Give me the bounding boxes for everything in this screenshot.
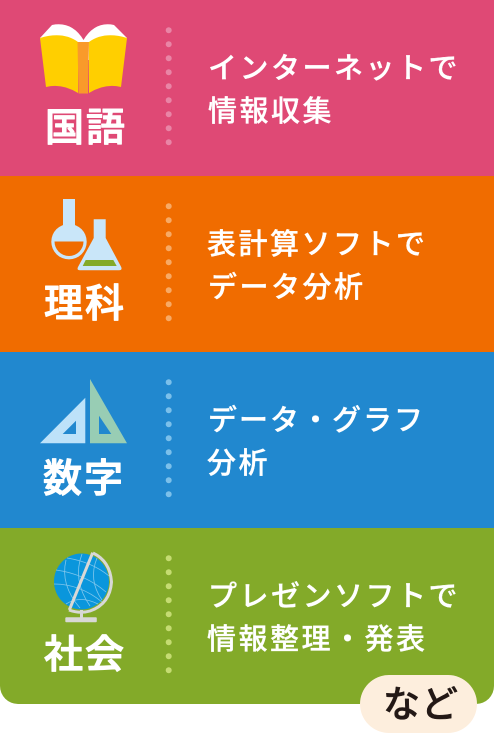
icon: flasks — [51, 199, 122, 270]
text: sugaku: データ・グラフ — [208, 404, 425, 437]
panel: sugaku — [0, 352, 494, 528]
text: rika — [207, 228, 428, 304]
text: kokugo — [208, 53, 460, 128]
text: kokugo: 情報収集 — [208, 95, 334, 128]
heading: rika: 理科 — [44, 283, 126, 326]
text: sugaku: 分析 — [207, 447, 270, 480]
icon: set squares — [40, 379, 127, 443]
text: kokugo: インターネットで — [208, 53, 460, 85]
heading: kokugo: 国語 — [45, 107, 127, 150]
icon: globe — [54, 553, 112, 622]
text: rika: データ分析 — [208, 271, 366, 304]
panel: kokugo — [0, 0, 494, 176]
text: shakai: 情報整理・発表 — [207, 623, 428, 656]
dotted divider — [166, 379, 172, 497]
text: sugaku — [207, 404, 425, 480]
panel: rika — [0, 176, 494, 352]
text: shakai: プレゼンソフトで — [208, 580, 460, 613]
badge: nado: など — [383, 684, 459, 725]
heading: sugaku: 数字 — [43, 458, 125, 501]
text: rika: 表計算ソフトで — [207, 228, 428, 261]
dotted divider — [166, 203, 172, 321]
heading: shakai: 社会 — [44, 634, 126, 677]
panel: shakai — [0, 528, 494, 704]
badge: nado — [360, 675, 477, 733]
dotted divider — [166, 555, 172, 673]
dotted divider — [166, 27, 172, 145]
icon: open book — [40, 24, 127, 93]
text: shakai — [207, 580, 460, 656]
